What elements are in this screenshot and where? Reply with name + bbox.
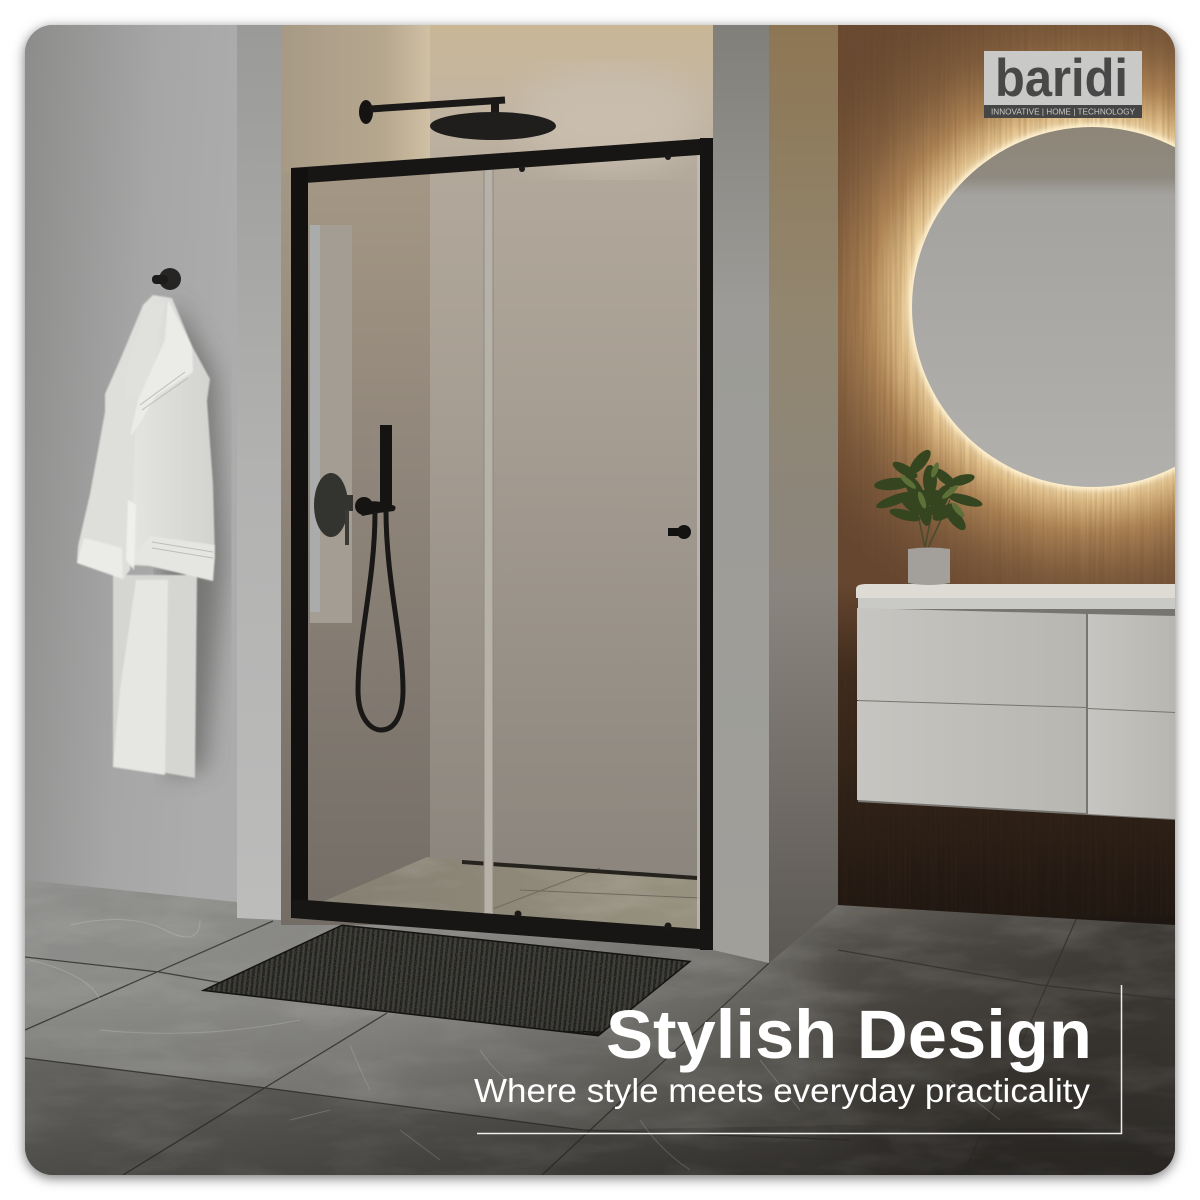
stems: [918, 500, 951, 548]
left partition wall: [237, 25, 281, 920]
left sleeve: [77, 305, 150, 579]
inner lapel: [125, 300, 165, 400]
bottom shade: [25, 1000, 1175, 1175]
glass reflection: [484, 166, 493, 914]
mirror: [909, 124, 1200, 490]
drawer: [1088, 614, 1175, 712]
logo wordmark: baridi: [995, 49, 1128, 108]
floor drain: [462, 860, 697, 880]
caption frame lines: [477, 985, 1122, 1134]
plant: [874, 447, 984, 585]
right cuff: [158, 539, 216, 581]
left cuff: [77, 538, 123, 579]
left post: [291, 168, 308, 918]
drawer: [857, 701, 1086, 813]
alcove back wall: [281, 25, 715, 925]
wood wall: [838, 25, 1175, 925]
bathrobe hook: [152, 268, 181, 290]
logo tagline: INNOVATIVE | HOME | TECHNOLOGY: [991, 106, 1135, 116]
belt: [126, 500, 136, 570]
right partition front: [713, 25, 769, 963]
shadow: [160, 300, 225, 775]
shower door: [291, 138, 713, 950]
right post: [700, 138, 713, 950]
shower floor: [322, 857, 700, 932]
bottom rail: [292, 899, 713, 950]
marble veins: [30, 920, 1000, 1170]
heading: Stylish Design: [606, 996, 1092, 1073]
wall-mounted rain shower: [359, 100, 556, 140]
foliage: [874, 447, 984, 533]
subtitle: Where style meets everyday practicality: [474, 1072, 1091, 1109]
door handle: [668, 525, 691, 539]
floor: [25, 880, 1175, 1175]
wall niche: [310, 225, 352, 623]
right partition side: [769, 25, 838, 963]
lower robe: [113, 575, 197, 778]
bathrobe: [77, 295, 225, 778]
shower mixer: [314, 473, 353, 545]
drawer: [857, 608, 1086, 707]
rollers: [514, 154, 672, 930]
left wall: [25, 25, 237, 902]
hand shower and hose: [355, 425, 403, 730]
upper body: [130, 295, 215, 581]
top rail: [291, 138, 713, 184]
glass edge: [697, 155, 700, 930]
vanity: [856, 584, 1175, 820]
pot: [908, 548, 950, 585]
collar fold: [130, 300, 193, 437]
drawer: [1088, 709, 1175, 819]
mat: [206, 926, 688, 1035]
logo badge: [984, 49, 1142, 118]
top slab: [856, 584, 1175, 598]
